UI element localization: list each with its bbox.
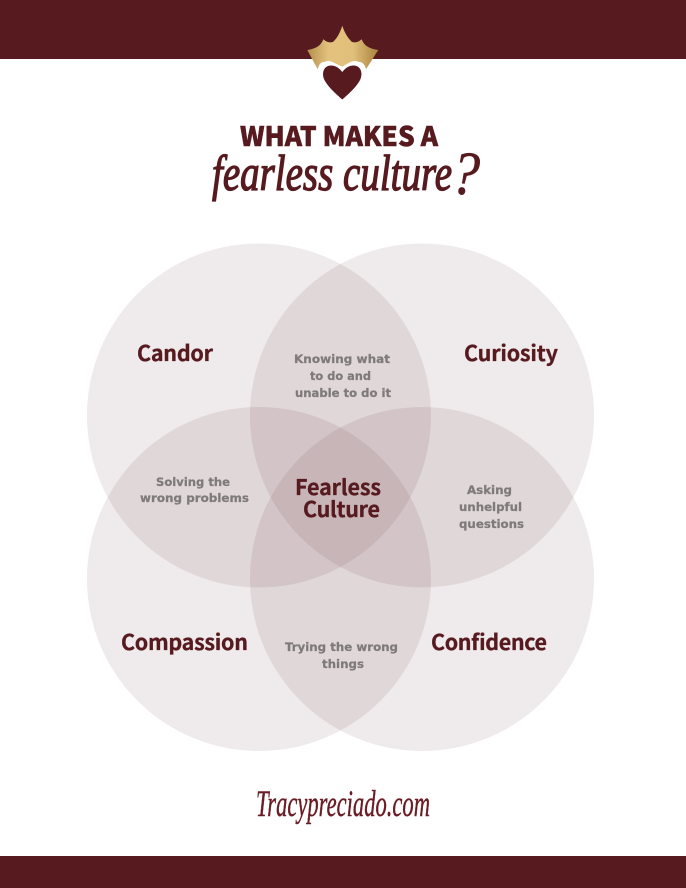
- icon: gold crown: [307, 26, 378, 69]
- label: compassion: Compassion: [121, 626, 248, 657]
- text: trying the wrong things: things: [322, 657, 364, 671]
- venn diagram: [87, 244, 594, 751]
- label: fearless culture: Fearless: [295, 471, 381, 502]
- text: asking unhelpful questions: questions: [459, 517, 524, 531]
- text: asking unhelpful questions: unhelpful: [459, 500, 522, 514]
- text: solving the wrong problems: [140, 475, 249, 505]
- heading: fearless culture: fearless culture: [212, 146, 452, 202]
- text: trying the wrong things: Trying the wrong: [285, 640, 398, 654]
- text: knowing what to do and unable to do it: Knowing what: [294, 352, 391, 366]
- circle: confidence: [250, 407, 594, 751]
- text: knowing what to do and unable to do it: unable to do it: [295, 386, 392, 400]
- label: confidence: Confidence: [431, 626, 547, 657]
- heading: fearless culture: ?: [449, 139, 482, 209]
- heading: fearless culture: [212, 139, 482, 209]
- label: curiosity: Curiosity: [464, 337, 559, 368]
- text: asking unhelpful questions: [459, 483, 524, 531]
- text: knowing what to do and unable to do it: [294, 352, 392, 400]
- label: candor: Candor: [137, 337, 214, 368]
- text: solving the wrong problems: Solving the: [156, 475, 230, 489]
- title: [212, 115, 482, 209]
- circle: curiosity: [250, 244, 594, 588]
- circle: compassion: [87, 407, 431, 751]
- website signature: Tracypreciado.com: [256, 783, 430, 824]
- text: asking unhelpful questions: Asking: [467, 483, 512, 497]
- label: fearless culture: [295, 471, 381, 524]
- bottom banner: [0, 856, 686, 888]
- text: knowing what to do and unable to do it: to do and: [310, 369, 371, 383]
- text: trying the wrong things: [285, 640, 398, 671]
- heading: what makes a: WHAT MAKES A: [240, 115, 439, 154]
- text: solving the wrong problems: wrong problems: [140, 491, 249, 505]
- icon: crown and heart logo: [307, 26, 378, 100]
- top banner: [0, 0, 686, 59]
- icon: heart: [323, 65, 361, 100]
- circle: candor: [87, 244, 431, 588]
- label: fearless culture: Culture: [303, 493, 380, 524]
